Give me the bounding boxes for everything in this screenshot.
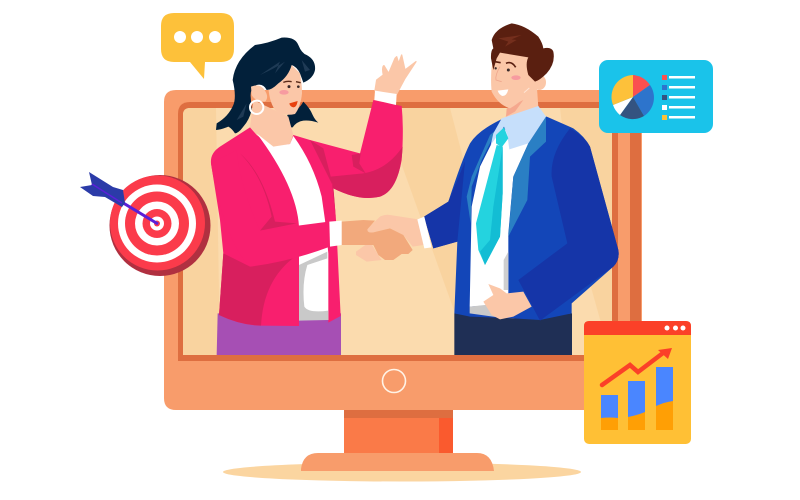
monitor stand bbox=[301, 405, 494, 471]
woman hand bbox=[342, 220, 413, 260]
woman hair back bbox=[287, 102, 318, 127]
woman shirt bbox=[257, 133, 328, 320]
pie chart bbox=[611, 75, 654, 119]
man bbox=[424, 23, 619, 355]
trend arrow bbox=[602, 348, 672, 385]
monitor frame bbox=[164, 90, 642, 410]
woman ear bbox=[251, 85, 267, 102]
woman raised hand bbox=[375, 55, 416, 94]
legend bbox=[662, 75, 695, 120]
man collar bbox=[491, 106, 546, 149]
arrow bbox=[80, 172, 158, 224]
pie chart card bbox=[599, 60, 713, 133]
jacket dark sleeves bbox=[518, 128, 619, 321]
woman hair bbox=[216, 38, 315, 133]
man face bbox=[491, 47, 535, 108]
jacket shading bbox=[331, 147, 403, 198]
woman neck bbox=[250, 100, 293, 147]
man neck bbox=[505, 83, 538, 128]
monitor screen bbox=[183, 108, 612, 355]
woman facial features bbox=[279, 81, 301, 107]
man tie bbox=[476, 127, 508, 265]
handshake bbox=[329, 215, 432, 262]
woman jacket bbox=[211, 100, 403, 326]
woman face bbox=[268, 63, 302, 115]
woman skirt bbox=[217, 313, 341, 355]
man hand bbox=[367, 215, 423, 247]
bars bbox=[601, 367, 673, 430]
man facial features bbox=[494, 62, 529, 96]
woman earring bbox=[250, 101, 263, 114]
woman cuff bbox=[329, 221, 342, 247]
lower fingers bbox=[356, 242, 382, 262]
man lapels bbox=[508, 117, 546, 237]
ground shadow bbox=[223, 462, 581, 482]
woman bbox=[211, 38, 416, 355]
man shirt bbox=[470, 127, 528, 307]
woman forearm bbox=[211, 150, 330, 267]
power button bbox=[382, 370, 406, 392]
man trousers bbox=[454, 313, 572, 355]
man cuff bbox=[417, 217, 432, 248]
man jacket bbox=[424, 117, 619, 320]
speech bubble bbox=[161, 13, 234, 79]
target with arrow bbox=[80, 172, 210, 276]
man ear bbox=[533, 75, 546, 90]
woman cuff top bbox=[374, 91, 397, 105]
growth chart window bbox=[584, 321, 691, 444]
man hand on belly bbox=[483, 284, 532, 319]
man hair bbox=[491, 23, 554, 82]
